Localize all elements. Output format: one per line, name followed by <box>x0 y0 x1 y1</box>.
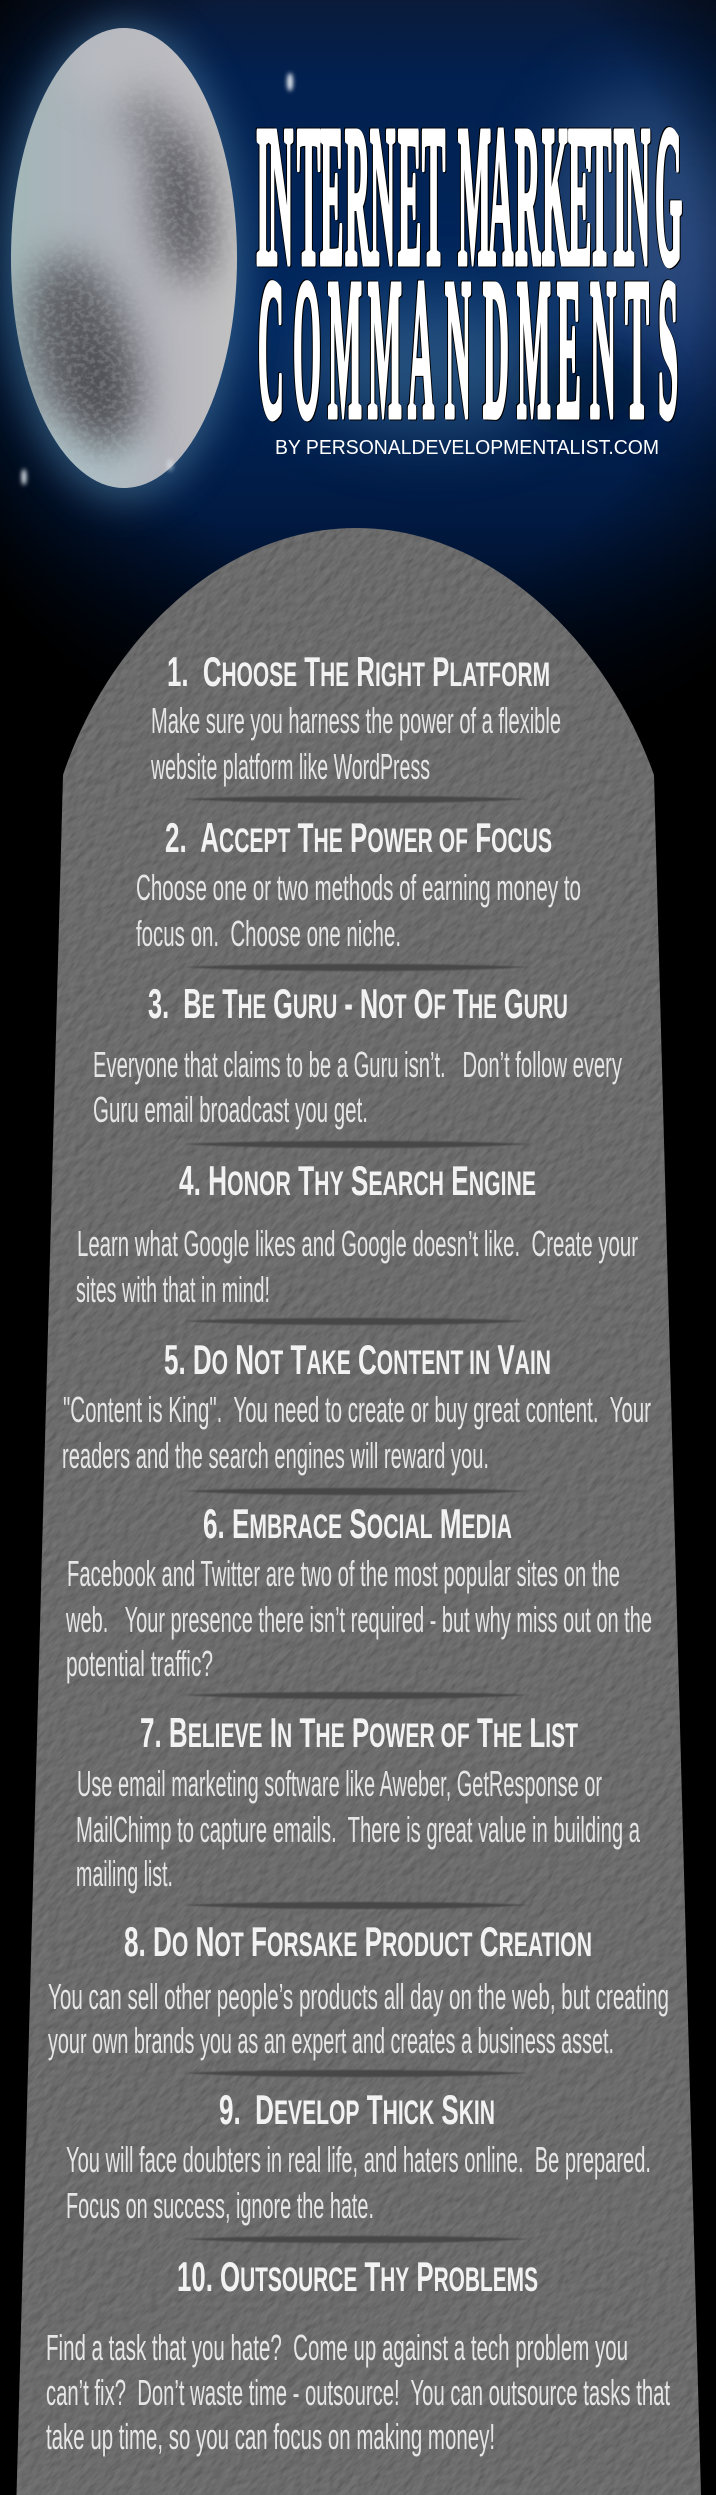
commandment 8 <box>48 1918 669 2061</box>
icon: moon <box>11 28 237 488</box>
commandment 6 <box>65 1500 652 1684</box>
body 9: Focus on success, ignore the hate. <box>66 2185 374 2226</box>
title <box>256 86 682 461</box>
heading 10: 10. OUTSOURCE THY PROBLEMS <box>177 2253 538 2300</box>
commandment 1 <box>150 648 561 787</box>
body 8 <box>48 1976 669 2061</box>
icon: moon glow <box>2 22 246 502</box>
heading 5: 5. DO NOT TAKE CONTENT IN VAIN <box>164 1336 551 1383</box>
body 4 <box>76 1223 638 1310</box>
heading 7: 7. BELIEVE IN THE POWER OF THE LIST <box>140 1709 578 1756</box>
heading 9: 9. DEVELOP THICK SKIN <box>219 2086 495 2133</box>
heading 1: 1. CHOOSE THE RIGHT PLATFORM <box>167 648 550 695</box>
heading 6: 6. EMBRACE SOCIAL MEDIA <box>203 1500 512 1547</box>
body 10 <box>46 2327 670 2457</box>
commandment 7 <box>76 1709 641 1894</box>
byline: BY PERSONALDEVELOPMENTALIST.COM <box>275 437 659 459</box>
commandment 10 <box>46 2253 670 2457</box>
heading 3: 3. BE THE GURU - NOT OF THE GURU <box>148 980 568 1027</box>
panel: stone tablet <box>16 528 702 2495</box>
title line 2: COMMANDMENTS <box>258 239 678 461</box>
body 1 <box>150 700 561 787</box>
commandment 5 <box>62 1336 651 1476</box>
body 7: mailing list. <box>76 1853 173 1894</box>
body 6: potential traffic? <box>66 1643 213 1684</box>
body 2 <box>136 867 581 954</box>
body 4: sites with that in mind! <box>76 1269 270 1310</box>
icon: star lower left <box>22 469 26 485</box>
body 6 <box>65 1553 652 1684</box>
commandment 9 <box>66 2086 651 2226</box>
commandment 4 <box>76 1157 638 1310</box>
heading 2: 2. ACCEPT THE POWER OF FOCUS <box>165 814 552 861</box>
icon: star <box>287 73 293 91</box>
body 9 <box>66 2139 651 2226</box>
body 1: website platform like WordPress <box>150 746 430 787</box>
title line 1: INTERNET MARKETING <box>256 86 682 308</box>
body 2: focus on. Choose one niche. <box>136 913 401 954</box>
commandment 3 <box>93 980 622 1130</box>
heading 4: 4. HONOR THY SEARCH ENGINE <box>179 1157 536 1204</box>
icon: star on moon <box>167 459 173 471</box>
body 3 <box>93 1044 622 1130</box>
heading 8: 8. DO NOT FORSAKE PRODUCT CREATION <box>124 1918 592 1965</box>
body 5 <box>62 1389 651 1476</box>
body 7 <box>76 1763 641 1894</box>
commandment 2 <box>136 814 581 954</box>
body 3: Guru email broadcast you get. <box>93 1089 368 1130</box>
